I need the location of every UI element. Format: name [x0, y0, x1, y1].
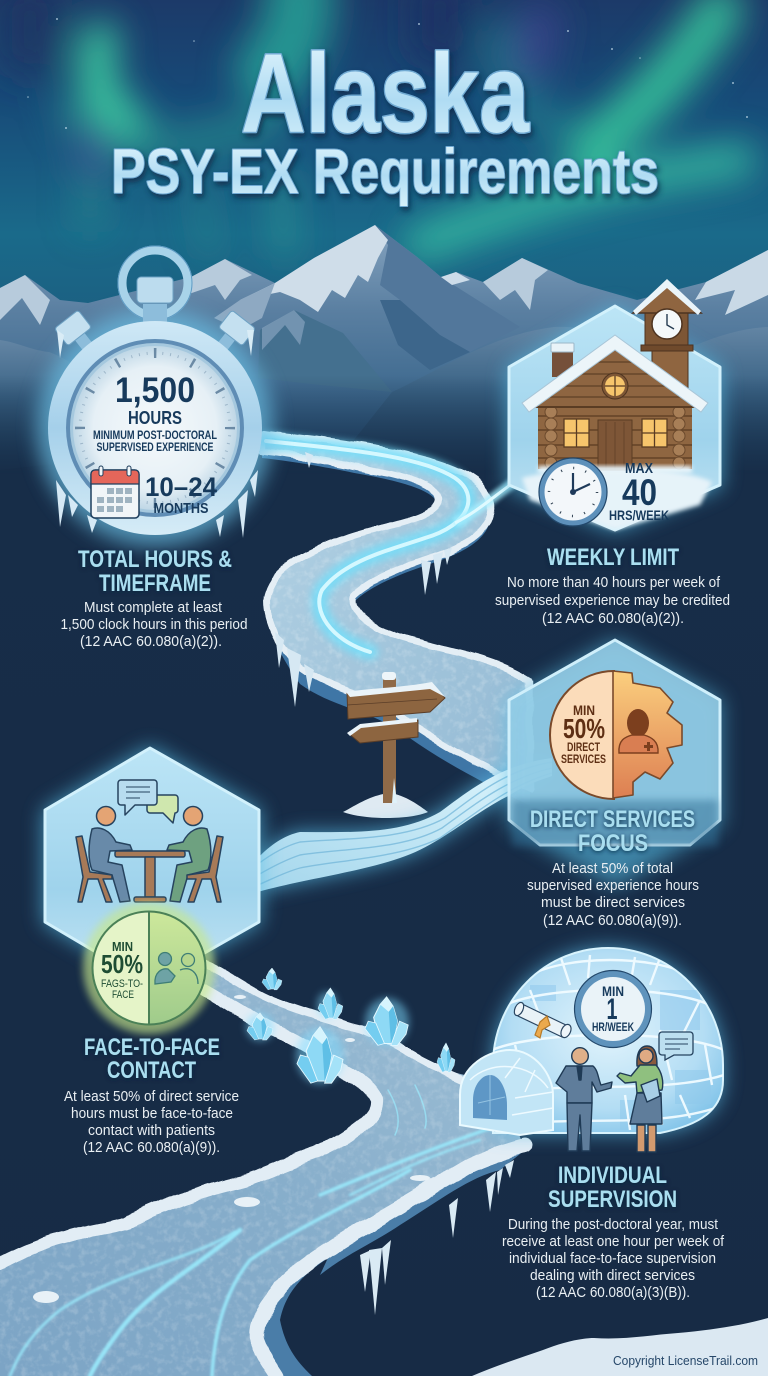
heading [548, 1162, 677, 1213]
icon: 50% direct services gear: MIN [573, 703, 595, 718]
heading [530, 806, 695, 857]
snow lumps on the ice [33, 995, 430, 1303]
body text [60, 599, 248, 650]
icon: one hour clock: MIN [602, 983, 624, 999]
icon: calendar [91, 466, 139, 518]
body text: contact with patients [88, 1122, 215, 1139]
icon: provider silhouette [619, 709, 658, 753]
icon: 50% face-to-face circle: 50% [101, 949, 143, 979]
frozen trail: lower section [0, 963, 525, 1376]
body text: (12 AAC 60.080(a)(2)). [542, 610, 684, 627]
aurora borealis [27, 0, 748, 250]
icon: 50% face-to-face circle: FAGS-TO- [101, 978, 143, 990]
icon: supervisor [556, 1048, 612, 1151]
body text [64, 1088, 239, 1156]
body text: supervised experience may be credited [495, 592, 730, 609]
icon: 50% face-to-face circle: FACE [112, 989, 134, 1001]
signpost [343, 672, 445, 818]
panel: direct services focus [507, 639, 722, 929]
body text: No more than 40 hours per week of [507, 574, 721, 591]
icicles: upper trail [275, 452, 452, 707]
snow bank, bottom right [472, 1318, 768, 1376]
stat: max 40 hrs/week: MAX [625, 460, 653, 477]
ice hexagon [507, 639, 722, 888]
stat: max 40 hrs/week [609, 460, 669, 523]
heading: CONTACT [107, 1057, 196, 1084]
heading: FACE-TO-FACE [84, 1034, 220, 1061]
heading: TIMEFRAME [99, 570, 211, 597]
stat: max 40 hrs/week: HRS/WEEK [609, 507, 669, 523]
icon: wall clock [539, 458, 607, 526]
body text: supervised experience hours [527, 877, 699, 894]
icicles: lower trail [360, 1160, 514, 1315]
body text: dealing with direct services [530, 1267, 695, 1284]
icon: 50% direct services gear: SERVICES [561, 752, 606, 766]
body text: (12 AAC 60.080(a)(2)). [80, 633, 222, 650]
frozen trail: ribbon to face-to-face panel [258, 758, 552, 892]
heading [78, 546, 232, 597]
heading: TOTAL HOURS & [78, 546, 232, 573]
body text: (12 AAC 60.080(a)(3)(B)). [536, 1284, 690, 1301]
title line: Alaska: Alaska [241, 31, 530, 156]
ice hexagon [507, 305, 722, 532]
icon: igloo [460, 948, 724, 1135]
icon: speech bubble [659, 1032, 693, 1060]
body text: At least 50% of total [552, 860, 673, 877]
icon: 50% face-to-face circle [83, 902, 215, 1034]
body text: receive at least one hour per week of [502, 1233, 725, 1250]
icon: one hour clock [574, 970, 652, 1048]
icon: log cabin and clock tower [522, 279, 708, 473]
stopwatch icon: MINIMUM POST-DOCTORAL [93, 430, 217, 442]
heading: DIRECT SERVICES [530, 806, 695, 833]
icon: one hour clock: 1 [606, 993, 618, 1026]
mountain range [0, 225, 768, 475]
icon: 50% direct services gear: 50% [563, 713, 605, 744]
body text: Must complete at least [84, 599, 223, 616]
panel: total hours and timeframe [37, 246, 273, 650]
heading: SUPERVISION [548, 1186, 677, 1213]
title line: PSY-EX Requirements: PSY-EX Requirements [111, 137, 659, 207]
body text [502, 1216, 725, 1301]
frozen trail: upper section [262, 434, 530, 806]
icon: supervisee [617, 1046, 663, 1152]
body text: During the post-doctoral year, must [508, 1216, 719, 1233]
body text: At least 50% of direct service [64, 1088, 239, 1105]
stopwatch icon: SUPERVISED EXPERIENCE [96, 442, 214, 454]
icon: one hour clock: HR/WEEK [592, 1020, 634, 1034]
body text: must be direct services [541, 894, 685, 911]
panel: face-to-face contact [43, 746, 261, 1156]
heading: FOCUS [578, 830, 648, 857]
icon: 50% direct services gear: DIRECT [567, 740, 600, 754]
icon: 50% direct services gear [550, 671, 682, 799]
stopwatch icon [37, 246, 273, 546]
icon: two people at a table [76, 780, 223, 902]
heading: INDIVIDUAL [558, 1162, 667, 1189]
copyright: Copyright LicenseTrail.com [613, 1354, 758, 1368]
body text: (12 AAC 60.080(a)(9)). [83, 1139, 220, 1156]
title [111, 31, 659, 207]
heading: WEEKLY LIMIT [547, 544, 679, 571]
icon: diploma scroll [512, 1001, 573, 1039]
icon: 50% face-to-face circle: MIN [112, 939, 133, 954]
stopwatch icon: HOURS [128, 408, 182, 428]
ice crystals along the trail [246, 968, 455, 1084]
body text: individual face-to-face supervision [509, 1250, 716, 1267]
stat: 10-24 months: 10–24 [145, 472, 217, 502]
stopwatch icon: MONTHS [154, 500, 208, 517]
panel: weekly limit [495, 279, 730, 627]
body text: (12 AAC 60.080(a)(9)). [543, 912, 682, 929]
body text [527, 860, 699, 929]
panel: individual supervision [460, 948, 725, 1301]
ice hexagon [43, 746, 261, 985]
stat: 1,500 hours: 1,500 [115, 371, 195, 410]
body text [495, 574, 730, 627]
heading [84, 1034, 220, 1084]
body text: 1,500 clock hours in this period [60, 616, 248, 633]
stat: max 40 hrs/week: 40 [622, 472, 657, 513]
body text: hours must be face-to-face [71, 1105, 233, 1122]
